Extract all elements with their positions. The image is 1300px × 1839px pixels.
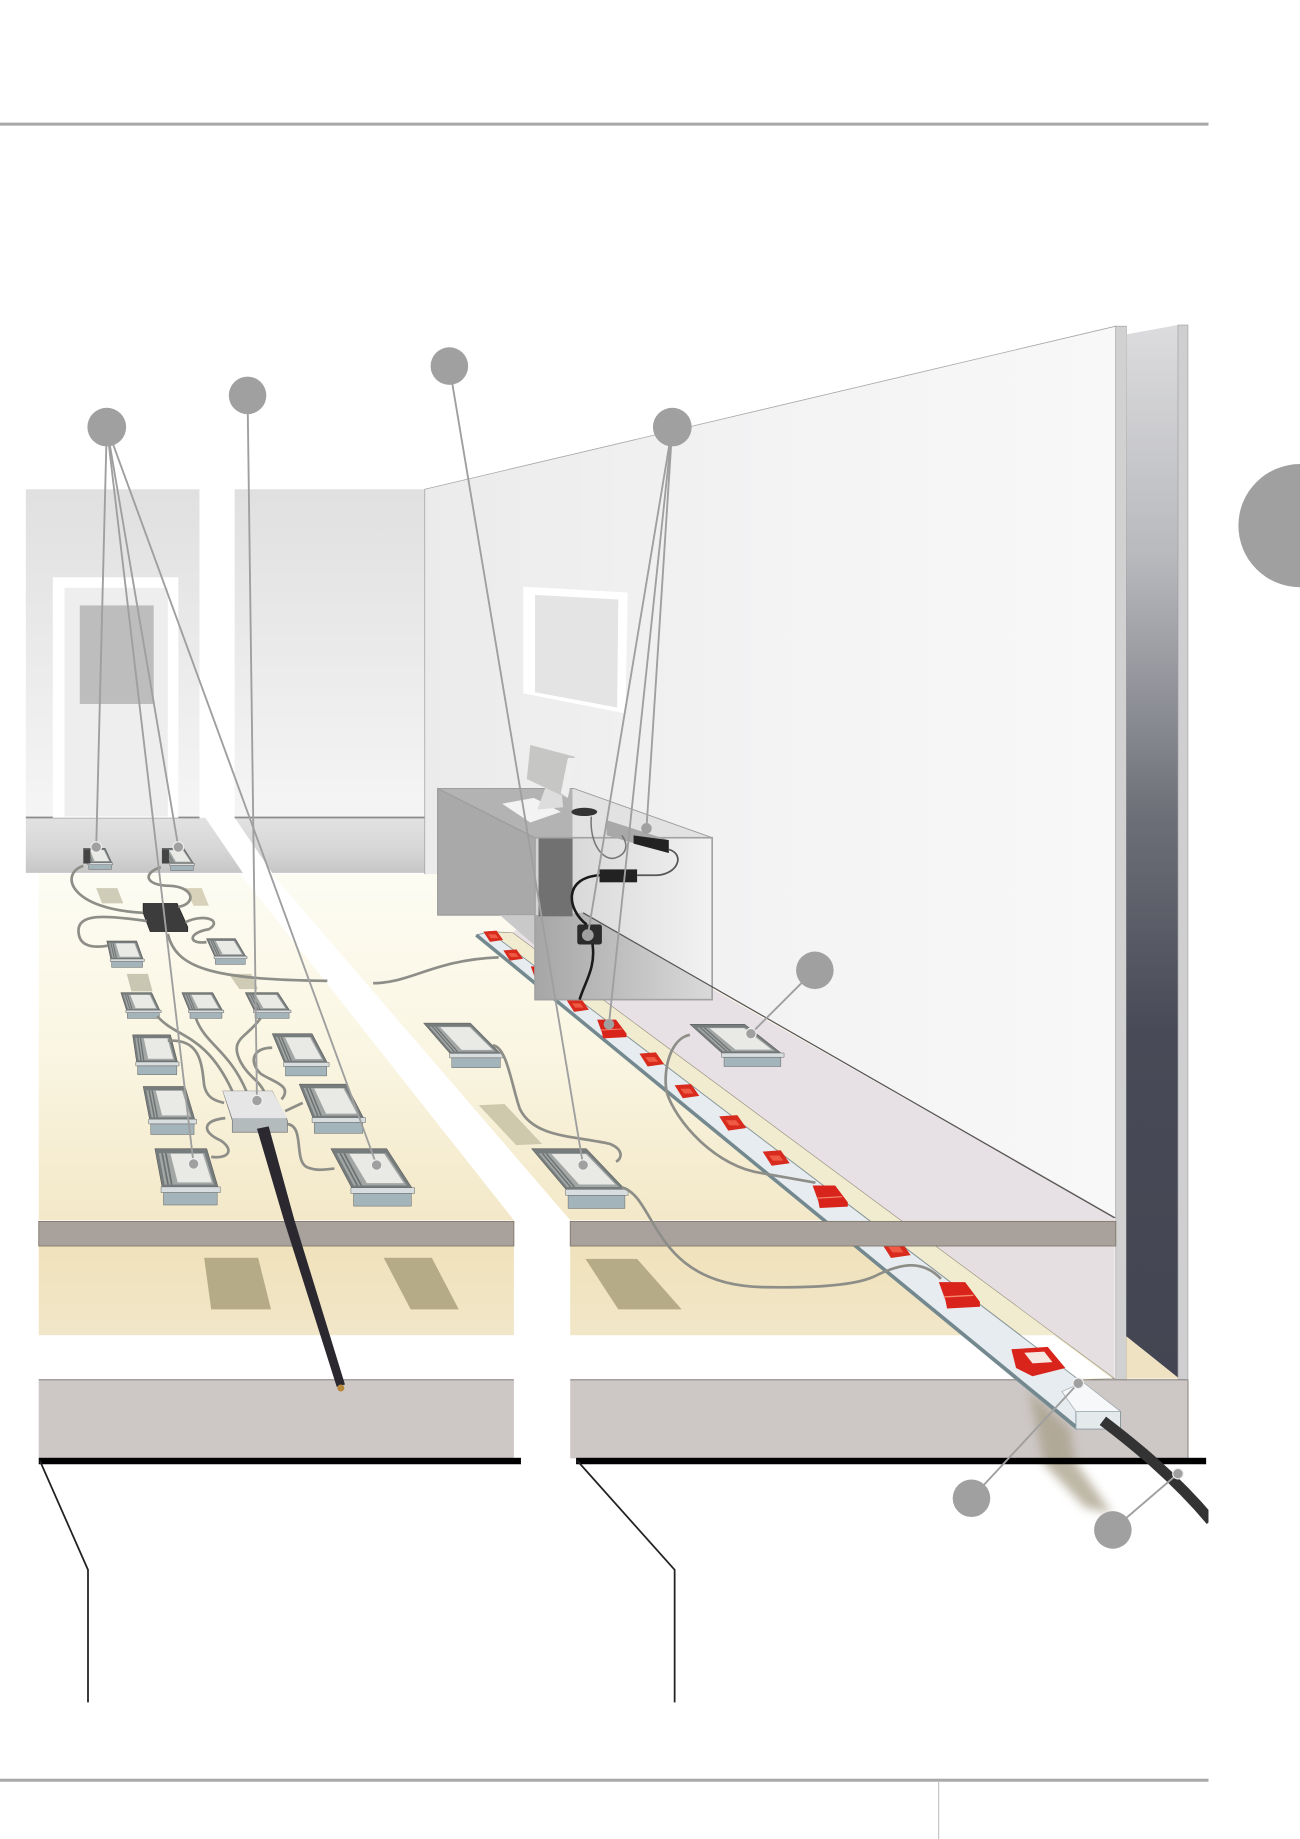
white mask right of page area bbox=[1208, 1384, 1300, 1537]
red tray modules bbox=[483, 931, 1065, 1376]
lower right floor section bbox=[570, 1246, 1115, 1379]
cable tray bbox=[476, 932, 1120, 1429]
floor boxes left group bbox=[83, 848, 415, 1206]
callout 6: cable tray bbox=[953, 1378, 1084, 1517]
floor boxes right group bbox=[424, 1023, 784, 1208]
junction box hub bbox=[223, 1091, 287, 1132]
back wall left section bbox=[26, 489, 438, 880]
callout 5: wall-side floor box bbox=[746, 952, 834, 1039]
tray shadow on wall and page bbox=[1029, 1390, 1112, 1514]
bottom rule bbox=[0, 1779, 1208, 1782]
door with window bbox=[53, 577, 178, 818]
grey cables bbox=[72, 866, 941, 1287]
callout 3: desk to floor box bbox=[431, 347, 588, 1170]
lavender wall base strip bbox=[513, 898, 1115, 1221]
main floor cable bbox=[257, 1126, 345, 1392]
callout 2: junction hub bbox=[229, 377, 266, 1106]
network switch dark box bbox=[143, 903, 188, 932]
black base line left bbox=[39, 1458, 521, 1464]
callout 1: four floor boxes bbox=[87, 408, 382, 1170]
desk bbox=[438, 788, 1115, 1218]
right floor panel bbox=[272, 874, 1115, 1220]
floor band right bbox=[570, 1221, 1116, 1246]
right end column bbox=[1116, 325, 1188, 1380]
section tab circle bbox=[1238, 464, 1300, 587]
leader bracket right bbox=[577, 1461, 675, 1702]
lower left floor section bbox=[39, 1246, 514, 1335]
lower wall blocks bbox=[39, 1379, 1189, 1458]
floor band left bbox=[39, 1221, 514, 1246]
yellow strip edge beside tray bbox=[489, 932, 1115, 1380]
white gap over strip near wall base bbox=[980, 1335, 1112, 1379]
floor shadow patches bbox=[96, 888, 682, 1309]
footer divider bbox=[938, 1781, 939, 1839]
main side wall bbox=[425, 326, 1116, 1218]
top rule bbox=[0, 123, 1208, 126]
black base line right bbox=[576, 1458, 1206, 1464]
power strip and adapters bbox=[571, 808, 678, 1000]
leader bracket left bbox=[40, 1461, 88, 1702]
phone handsets bbox=[83, 849, 169, 864]
wall window bbox=[523, 587, 628, 713]
callout 4: power devices bbox=[582, 408, 692, 1030]
callout 7: feed cable bbox=[1094, 1468, 1183, 1549]
left floor panel bbox=[39, 874, 514, 1220]
cable end of tray bbox=[1103, 1421, 1211, 1521]
monitor and keyboard on desk bbox=[502, 745, 576, 822]
